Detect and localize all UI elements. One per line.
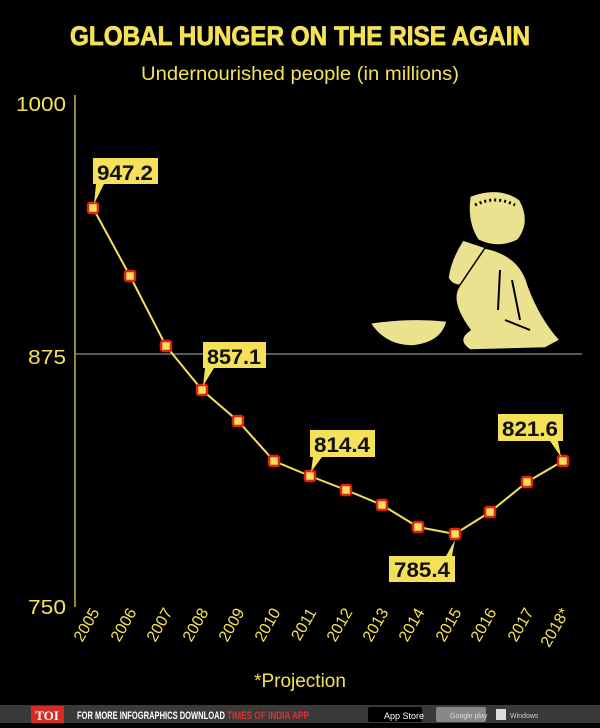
callouts: 857.1: [207, 346, 261, 369]
y axis: 1000: [16, 94, 66, 116]
x axis labels: 2016: [468, 605, 501, 645]
callouts: 821.6: [502, 418, 558, 441]
line chart: [88, 203, 568, 539]
x axis labels: 2009: [216, 605, 249, 645]
x axis labels: 2007: [144, 605, 177, 645]
footer bar: Google play: [450, 713, 488, 720]
footer bar: App Store: [384, 711, 424, 721]
footer bar: Windows: [510, 713, 539, 720]
x axis labels: 2010: [252, 605, 285, 645]
x axis labels: 2008: [180, 605, 213, 645]
illustration: starving child with bowl: [370, 191, 560, 350]
x axis labels: 2014: [396, 605, 429, 645]
footer bar: TOI: [35, 708, 59, 723]
footer bar: TIMES OF INDIA APP: [227, 710, 309, 722]
x axis labels: 2018*: [538, 606, 573, 650]
title: GLOBAL HUNGER ON THE RISE AGAIN: [70, 21, 530, 51]
footer bar: FOR MORE INFOGRAPHICS DOWNLOAD: [77, 710, 225, 722]
x axis labels: 2005: [71, 605, 104, 645]
y axis: [16, 94, 582, 619]
x axis labels: 2017: [505, 605, 538, 645]
x axis labels: [71, 605, 573, 650]
x axis labels: 2015: [433, 605, 466, 645]
y axis: 875: [28, 347, 66, 369]
footnote: *Projection: [254, 671, 346, 692]
callouts: 814.4: [314, 434, 370, 457]
x axis labels: 2012: [324, 605, 357, 645]
callouts: [93, 158, 563, 582]
x axis labels: 2011: [289, 605, 321, 644]
subtitle: Undernourished people (in millions): [141, 64, 459, 85]
y axis: 750: [28, 597, 66, 619]
footer bar: [0, 705, 600, 723]
callouts: 785.4: [394, 559, 450, 582]
x axis labels: 2006: [108, 605, 141, 645]
x axis labels: 2013: [360, 605, 393, 645]
callouts: 947.2: [97, 162, 153, 185]
